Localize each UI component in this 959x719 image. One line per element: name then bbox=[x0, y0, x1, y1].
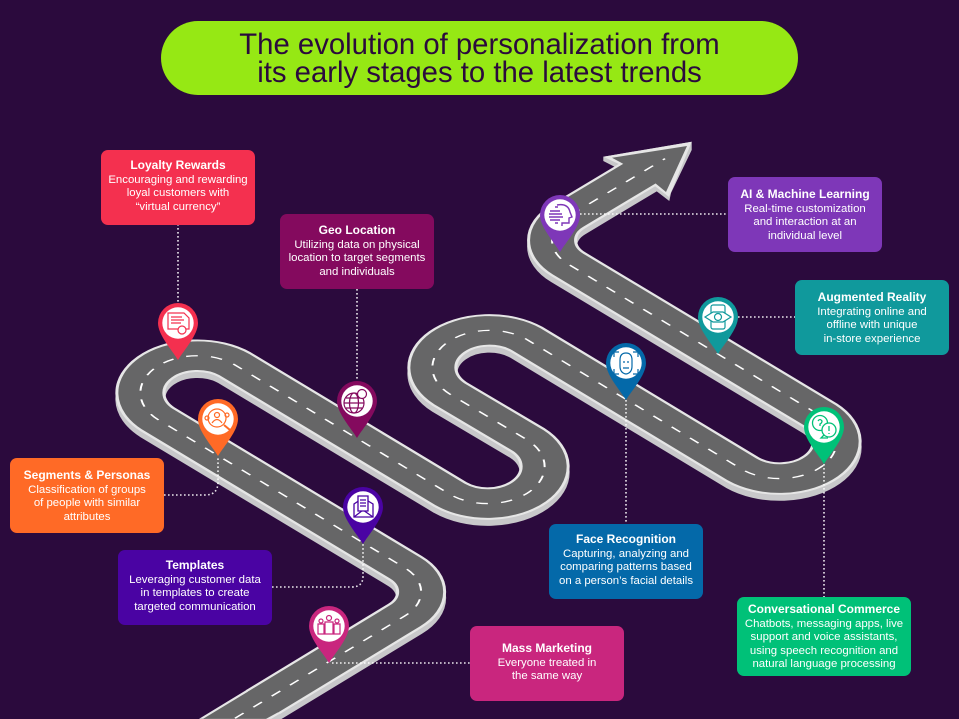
panel: geo location: location to target segments bbox=[289, 252, 425, 264]
panel: geo location bbox=[280, 214, 434, 289]
panel: templates: Templates bbox=[166, 558, 224, 572]
panel: geo location: Utilizing data on physical bbox=[294, 238, 420, 250]
panel: augmented reality: Integrating online and bbox=[817, 306, 927, 318]
panel: conversational commerce: Chatbots, messaging apps, live bbox=[745, 618, 903, 630]
panel: conversational commerce: natural language processing bbox=[752, 658, 896, 670]
panel: face recognition: comparing patterns based bbox=[560, 561, 692, 573]
panel: AI and machine learning: and interaction at an bbox=[753, 216, 857, 228]
panel: templates: Leveraging customer data bbox=[129, 574, 261, 586]
panel: loyalty rewards: Loyalty Rewards bbox=[130, 158, 226, 172]
panel: geo location: Geo Location bbox=[319, 223, 395, 237]
arrow head surface bbox=[612, 146, 687, 192]
title bbox=[161, 21, 798, 95]
pin: mass marketing bbox=[309, 606, 349, 663]
title: The evolution of personalization from bbox=[239, 28, 720, 61]
pin: face recognition bbox=[606, 343, 646, 400]
panel: loyalty rewards bbox=[101, 150, 255, 225]
pin: AI and machine learning bbox=[540, 195, 580, 252]
pin: templates bbox=[343, 487, 383, 544]
panel: conversational commerce: support and voice assistants, bbox=[751, 631, 897, 643]
panel: loyalty rewards: Encouraging and rewarding bbox=[108, 174, 248, 186]
panel: augmented reality: offline with unique bbox=[826, 319, 917, 331]
panel: segments and personas: of people with similar bbox=[34, 497, 140, 509]
panel: mass marketing: Mass Marketing bbox=[502, 641, 592, 655]
pin: segments and personas bbox=[198, 399, 238, 456]
panel: augmented reality bbox=[795, 280, 949, 355]
panel: face recognition: Face Recognition bbox=[576, 532, 676, 546]
pin: conversational commerce bbox=[804, 407, 844, 464]
panel: AI and machine learning bbox=[728, 177, 882, 252]
panel: augmented reality: in-store experience bbox=[824, 332, 920, 344]
panel: AI and machine learning: individual level bbox=[768, 230, 842, 242]
panel: segments and personas: attributes bbox=[64, 510, 110, 522]
panel: conversational commerce: Conversational Commerce bbox=[748, 602, 900, 616]
dotted connectors bbox=[164, 214, 824, 663]
panel: loyalty rewards: loyal customers with bbox=[127, 187, 229, 199]
panel: segments and personas bbox=[10, 458, 164, 533]
winding road bbox=[140, 142, 837, 719]
panel: templates bbox=[118, 550, 272, 625]
panel: face recognition bbox=[549, 524, 703, 599]
panel: mass marketing: the same way bbox=[512, 670, 582, 682]
arrow head rim bbox=[603, 142, 692, 197]
pin: loyalty rewards bbox=[158, 303, 198, 360]
panel: geo location: and individuals bbox=[319, 266, 395, 278]
title: its early stages to the latest trends bbox=[257, 56, 702, 89]
panel: conversational commerce: using speech recognition and bbox=[750, 644, 898, 656]
panel: mass marketing bbox=[470, 626, 624, 701]
panel: mass marketing: Everyone treated in bbox=[498, 656, 596, 668]
panel: AI and machine learning: Real-time customization bbox=[744, 202, 866, 214]
pin: augmented reality bbox=[698, 297, 738, 354]
panel: segments and personas: Classification of groups bbox=[28, 484, 146, 496]
panel: conversational commerce bbox=[737, 597, 911, 676]
panel: templates: in templates to create bbox=[141, 587, 249, 599]
panel: augmented reality: Augmented Reality bbox=[818, 290, 926, 304]
panel: AI and machine learning: AI & Machine Learning bbox=[740, 187, 870, 201]
panel: templates: targeted communication bbox=[134, 600, 256, 612]
panel: face recognition: Capturing, analyzing and bbox=[563, 548, 689, 560]
panel: loyalty rewards: “virtual currency” bbox=[136, 200, 220, 212]
panel: face recognition: on a person’s facial details bbox=[559, 574, 693, 586]
pin: geo location bbox=[337, 381, 377, 438]
panel: segments and personas: Segments & Personas bbox=[24, 468, 150, 482]
